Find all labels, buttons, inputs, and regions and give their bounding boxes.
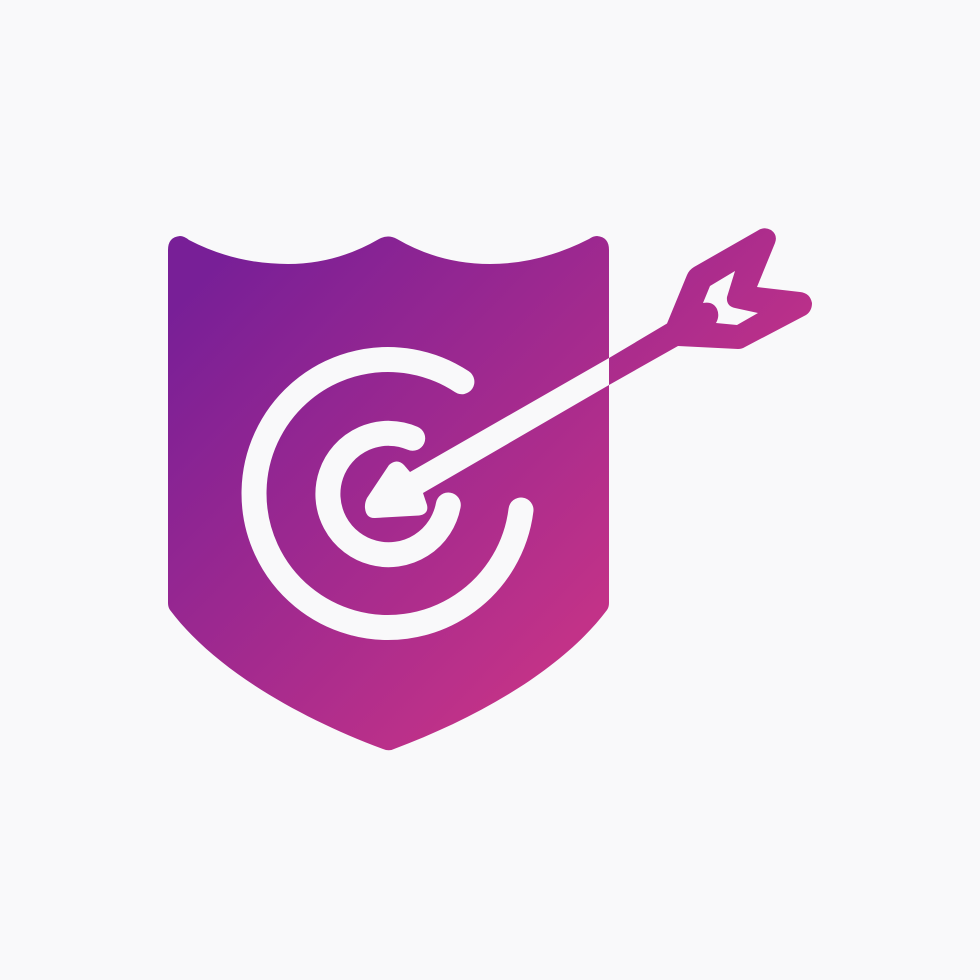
shield bbox=[168, 236, 609, 750]
arrow shaft and fletching outside shield bbox=[609, 228, 812, 385]
target: inner ring bbox=[328, 433, 448, 555]
arrow head and shaft inside shield bbox=[365, 358, 609, 518]
target: outer ring bbox=[254, 359, 521, 627]
